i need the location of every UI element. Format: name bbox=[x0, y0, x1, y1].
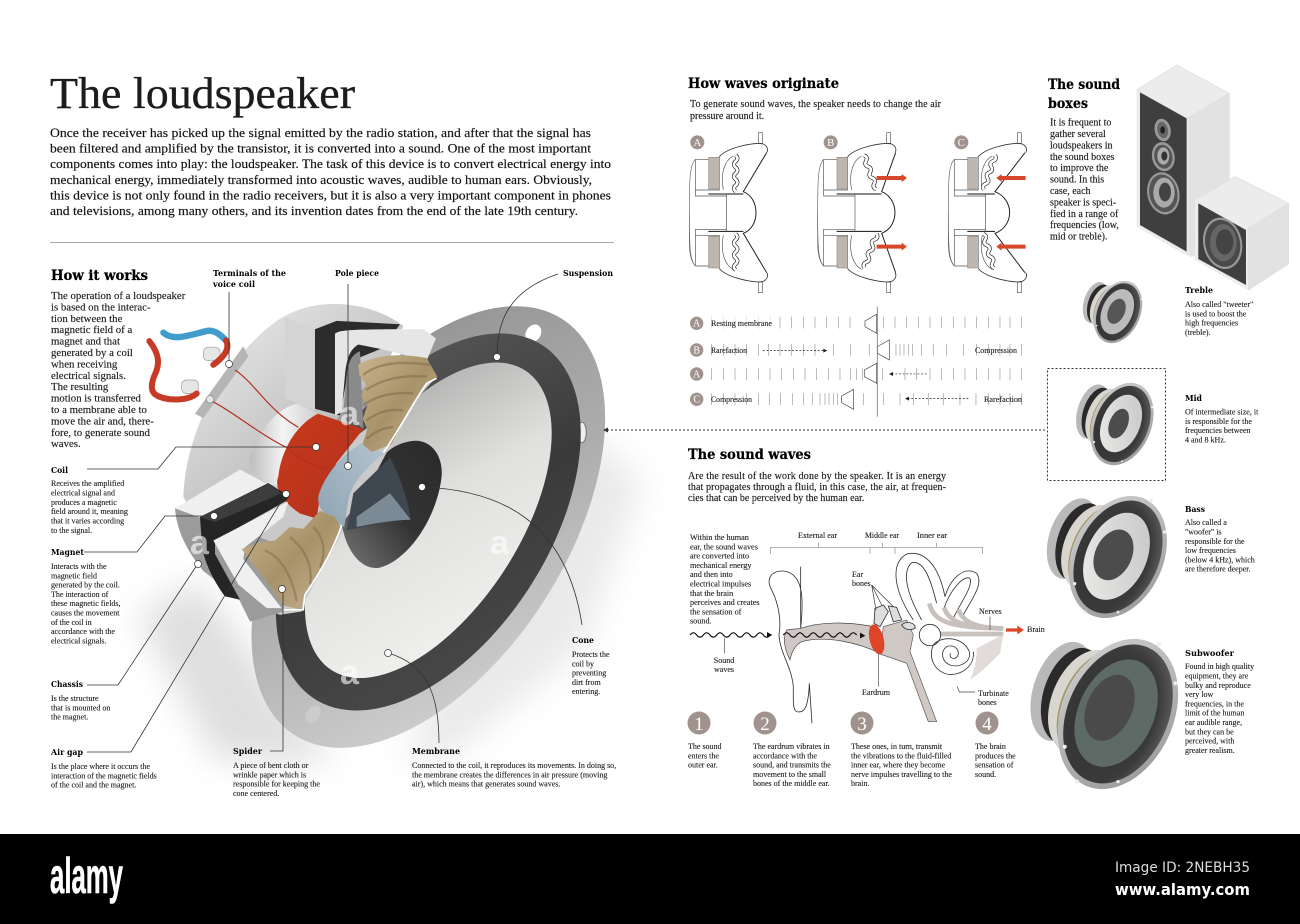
label: treble: (treble). bbox=[1185, 328, 1211, 337]
wave diagram bbox=[690, 307, 1022, 417]
sound boxes paragraph: loudspeakers in bbox=[1050, 140, 1112, 151]
middle ear block bbox=[880, 620, 937, 722]
step 4 bbox=[975, 712, 1016, 779]
callout: magnet: accordance with the bbox=[51, 627, 115, 636]
step 4: produces the bbox=[975, 751, 1016, 760]
label: subwoofer: perceived, with bbox=[1185, 737, 1234, 746]
label: subwoofer: bulky and reproduce bbox=[1185, 681, 1251, 690]
panel: how it works text bbox=[51, 268, 188, 450]
callout: magnet: Interacts with the bbox=[51, 562, 107, 571]
intro paragraph: components comes into play: the loudspeaker. The task of this device is to convert electrical energy into bbox=[50, 157, 611, 171]
dust cap bbox=[342, 441, 442, 568]
how it works paragraph: The resulting bbox=[51, 381, 109, 393]
small cabinet bbox=[1195, 177, 1289, 290]
coil bbox=[277, 414, 363, 519]
lower chassis bowl bbox=[175, 508, 283, 622]
sound waves paragraph: cies that can be perceived by the human ear. bbox=[688, 493, 864, 504]
step 3: inner ear, where they become bbox=[851, 761, 946, 770]
speaker cutaway illustration bbox=[137, 243, 677, 811]
intro paragraph: this device is not only found in the radio receivers, but it is also a very important component in phones bbox=[50, 188, 611, 202]
callout: cone: preventing bbox=[572, 669, 606, 678]
lower magnet bbox=[175, 470, 289, 600]
callout: magnet: these magnetic fields, bbox=[51, 599, 121, 608]
front frame bbox=[179, 243, 677, 811]
sound boxes paragraph: It is frequent to bbox=[1050, 118, 1111, 128]
callout: air gap: Air gap bbox=[50, 748, 83, 758]
sound boxes paragraph: mid or treble). bbox=[1050, 232, 1107, 243]
callout: spider bbox=[233, 747, 320, 798]
callout: coil: electrical signal and bbox=[51, 488, 115, 497]
intro paragraph: been filtered and amplified by the transistor, it is converted into a sound. One of the most important bbox=[50, 142, 592, 156]
callout: coil: field around it, meaning bbox=[51, 507, 128, 516]
how it works paragraph: magnet and that bbox=[51, 336, 120, 348]
wave diagram labels: Compression bbox=[975, 346, 1017, 355]
arrow to brain bbox=[1006, 626, 1024, 634]
red wire bbox=[149, 340, 227, 399]
step 3: These ones, in turn, transmit bbox=[851, 742, 943, 751]
wave diagram: A bbox=[693, 319, 701, 330]
step 2: The eardrum vibrates in bbox=[753, 742, 830, 751]
callout: membrane: Membrane bbox=[412, 747, 461, 757]
lower pole plate bbox=[213, 502, 288, 608]
callout: air gap: interaction of the magnetic fields bbox=[51, 771, 157, 780]
ear labels: Turbinate bbox=[978, 689, 1009, 698]
sound boxes paragraph: frequencies (low, bbox=[1050, 220, 1119, 231]
ear labels: bones bbox=[978, 698, 997, 707]
ear labels: bones bbox=[852, 579, 871, 588]
step 3: the vibrations to the fluid-filled bbox=[851, 751, 951, 760]
heading: the sound boxes: boxes bbox=[1048, 96, 1088, 112]
vestibule and cochlea bbox=[919, 624, 973, 674]
callout: spider: wrinkle paper which is bbox=[233, 770, 306, 779]
watermark letters bbox=[190, 395, 510, 692]
label: subwoofer: very low bbox=[1185, 690, 1213, 699]
label: treble: is used to boost the bbox=[1185, 309, 1247, 318]
membrane triangles bbox=[842, 314, 889, 409]
label: subwoofer: but they can be bbox=[1185, 727, 1234, 736]
sound boxes paragraph: gather several bbox=[1050, 129, 1106, 140]
cross-section B: B bbox=[827, 138, 834, 149]
label: subwoofer: frequencies, in the bbox=[1185, 699, 1244, 708]
callout: cone bbox=[572, 636, 610, 696]
ear section bracket bbox=[771, 543, 983, 554]
wave diagram labels bbox=[710, 316, 1022, 404]
wave diagram labels: Resting membrane bbox=[711, 319, 772, 328]
ear labels: Eardrum bbox=[862, 688, 891, 697]
callout: magnet bbox=[51, 548, 121, 645]
ear intro text: sound. bbox=[690, 617, 712, 626]
sound boxes paragraph: case, each bbox=[1050, 186, 1091, 197]
step 3: nerve impulses travelling to the bbox=[851, 770, 952, 779]
frame mounting holes bbox=[303, 321, 586, 726]
how it works paragraph: The operation of a loudspeaker bbox=[51, 290, 186, 302]
label: mid: 4 and 8 kHz. bbox=[1185, 435, 1226, 444]
callout: spider: cone centered. bbox=[233, 789, 279, 798]
rear basket bbox=[183, 304, 403, 497]
ear intro text: electrical impulses bbox=[690, 580, 751, 588]
canal sound wave bbox=[783, 633, 865, 639]
callout: cone: dirt from bbox=[572, 678, 601, 687]
callout: membrane: the membrane creates the differences in air pressure (moving bbox=[412, 770, 607, 779]
dotted frame around mid speaker bbox=[1048, 368, 1166, 480]
intro paragraph: and televisions, among many others, and its invention dates from the end of the late 19th century. bbox=[50, 204, 578, 218]
label: bass: low frequencies bbox=[1185, 546, 1236, 555]
outgoing sound wave bbox=[690, 632, 772, 638]
label: subwoofer bbox=[1185, 649, 1254, 755]
outer ear bbox=[769, 567, 812, 723]
heading: the sound boxes: The sound bbox=[1048, 77, 1120, 93]
how it works paragraph: generated by a coil bbox=[51, 347, 133, 359]
callout: cone: Protects the bbox=[572, 650, 610, 659]
callout: coil bbox=[51, 466, 128, 535]
terminal posts bbox=[182, 347, 220, 394]
cross-section C bbox=[948, 133, 1027, 293]
speaker: mid bbox=[1070, 372, 1166, 476]
how it works paragraph: electrical signals. bbox=[51, 370, 126, 382]
ear labels: Ear bbox=[852, 570, 863, 579]
how it works paragraph: fore, to generate sound bbox=[51, 427, 151, 439]
step 4: sound. bbox=[975, 770, 996, 779]
callout: coil: that it varies according bbox=[51, 517, 124, 526]
ear labels: External ear bbox=[798, 531, 837, 540]
upper spider bbox=[358, 355, 437, 452]
cochlear tail bbox=[970, 635, 1003, 680]
sound boxes paragraph: speaker is speci- bbox=[1050, 197, 1116, 208]
sound waves paragraph: that propagates through a fluid, in this case, the air, at frequen- bbox=[688, 482, 946, 493]
step 1: outer ear. bbox=[688, 761, 718, 770]
leader lines and dots bbox=[84, 274, 582, 752]
label: bass: Also called a bbox=[1185, 518, 1227, 527]
ear labels: Nerves bbox=[979, 607, 1002, 616]
callout: chassis: Chassis bbox=[51, 680, 83, 690]
wave diagram: A bbox=[693, 369, 701, 380]
watermark letters: a bbox=[190, 524, 210, 562]
callout: spider: Spider bbox=[233, 747, 262, 757]
callout: cone: Cone bbox=[572, 636, 595, 646]
label: bass: are therefore deeper. bbox=[1185, 565, 1251, 574]
sound boxes paragraph: sound. In this bbox=[1050, 175, 1104, 186]
callout: air gap: of the coil and the magnet. bbox=[51, 781, 136, 790]
callout: magnet: The interaction of bbox=[51, 590, 109, 599]
ear labels: Brain bbox=[1027, 625, 1045, 634]
callout: cone: entering. bbox=[572, 687, 600, 696]
step 1: enters the bbox=[688, 751, 719, 760]
ear bones bbox=[874, 605, 915, 630]
intro paragraph: Once the receiver has picked up the signal emitted by the radio station, and after that the signal has bbox=[50, 126, 591, 140]
dotted connector arrow bbox=[603, 428, 1047, 432]
voice coil wires bbox=[213, 370, 327, 470]
wave diagram labels: Rarefaction bbox=[984, 395, 1022, 404]
step 3: brain. bbox=[851, 779, 869, 788]
watermark letters: a bbox=[490, 524, 510, 562]
label: treble bbox=[1185, 286, 1253, 337]
how it works paragraph: magnetic field of a bbox=[51, 324, 132, 336]
inner hollow bbox=[347, 458, 411, 530]
speaker: subwoofer bbox=[1019, 619, 1201, 809]
callout: spider: responsible for keeping the bbox=[233, 780, 320, 789]
label: terminals of the voice coil: voice coil bbox=[212, 280, 256, 290]
image id: Image ID: 2NEBH35 bbox=[1115, 860, 1250, 876]
label: subwoofer: limit of the human bbox=[1185, 709, 1244, 718]
rear cut filling bbox=[183, 377, 437, 615]
step 2: 2 bbox=[760, 714, 770, 735]
ear labels bbox=[714, 531, 1045, 707]
step 3: 3 bbox=[857, 714, 867, 735]
callout: chassis: the magnet. bbox=[51, 713, 88, 722]
membrane bbox=[255, 320, 601, 720]
label: treble: high frequencies bbox=[1185, 319, 1238, 328]
ear diagram bbox=[690, 543, 1024, 723]
label: bass: "woofer" is bbox=[1185, 528, 1222, 536]
terminal plate bbox=[195, 346, 248, 418]
sound boxes paragraph: to improve the bbox=[1050, 163, 1109, 174]
lower spider bbox=[242, 511, 341, 610]
callout: magnet: causes the movement bbox=[51, 608, 120, 618]
label: subwoofer: Subwoofer bbox=[1185, 649, 1234, 659]
callout: chassis: that is mounted on bbox=[51, 703, 110, 712]
cross-section A: A bbox=[693, 138, 701, 149]
step 2: sound, and transmits the bbox=[753, 761, 831, 770]
wave diagram: B bbox=[693, 345, 700, 356]
label: bass: (below 4 kHz), which bbox=[1185, 555, 1255, 564]
label: subwoofer: ear audible range, bbox=[1185, 718, 1242, 727]
watermark letters: a bbox=[340, 395, 360, 433]
label: bass: responsible for the bbox=[1185, 537, 1245, 546]
dashed arrows bbox=[763, 351, 968, 399]
ear intro text: are converted into bbox=[690, 552, 749, 561]
label: pole piece: Pole piece bbox=[335, 269, 380, 279]
step 2: accordance with the bbox=[753, 751, 817, 760]
pole piece former bbox=[318, 443, 385, 527]
label: subwoofer: greater realism. bbox=[1185, 746, 1235, 755]
callout: coil: Receives the amplified bbox=[51, 479, 124, 488]
ear intro text: mechanical energy bbox=[690, 561, 752, 570]
ear labels: Middle ear bbox=[865, 531, 899, 540]
upper magnet block bbox=[285, 317, 436, 429]
ear intro text: and then into bbox=[690, 570, 733, 579]
suspension surround bbox=[213, 279, 643, 765]
callout: magnet: Magnet bbox=[51, 548, 84, 558]
heading: the sound waves: The sound waves bbox=[688, 447, 811, 463]
ear intro text: Within the human bbox=[690, 533, 749, 542]
ear labels: waves bbox=[714, 665, 734, 674]
cross-section A bbox=[689, 133, 768, 293]
label: mid: Of intermediate size, it bbox=[1185, 408, 1259, 416]
label: suspension: Suspension bbox=[563, 269, 613, 279]
callout: membrane bbox=[412, 747, 616, 789]
callout: magnet: magnetic field bbox=[51, 571, 97, 580]
ear intro text: that the brain bbox=[690, 589, 733, 598]
label: treble: Treble bbox=[1185, 286, 1214, 296]
label: bass: Bass bbox=[1185, 505, 1205, 515]
website: www.alamy.com bbox=[1115, 880, 1250, 899]
callout: coil: produces a magnetic bbox=[51, 498, 117, 507]
step 4: The brain bbox=[975, 742, 1006, 751]
label: mid: frequencies between bbox=[1185, 426, 1251, 435]
speaker: bass bbox=[1037, 480, 1186, 634]
watermark letters: a bbox=[340, 654, 360, 692]
blue wire bbox=[163, 331, 227, 341]
sound boxes paragraph: the sound boxes bbox=[1050, 152, 1115, 163]
wave diagram: C bbox=[693, 395, 700, 406]
nerves bbox=[929, 603, 1003, 634]
label: mid: Mid bbox=[1185, 394, 1202, 404]
wave diagram labels: Rarefaction bbox=[711, 346, 747, 355]
callout: membrane: air), which means that generates sound waves. bbox=[412, 780, 560, 789]
how it works paragraph: waves. bbox=[51, 438, 81, 450]
white rear cylinder bbox=[249, 404, 317, 486]
step 2: movement to the small bbox=[753, 770, 827, 779]
how it works paragraph: when receiving bbox=[51, 358, 118, 370]
label: mid bbox=[1185, 394, 1259, 444]
label: treble: Also called "tweeter" bbox=[1185, 300, 1253, 309]
sound waves paragraph: Are the result of the work done by the speaker. It is an energy bbox=[688, 471, 946, 482]
callout: coil: to the signal. bbox=[51, 526, 92, 535]
tall cabinet bbox=[1137, 65, 1229, 257]
sound boxes paragraph: fied in a range of bbox=[1050, 209, 1119, 220]
ear intro text: perceives and creates bbox=[690, 598, 760, 607]
eardrum bbox=[866, 623, 887, 656]
callout: chassis: Is the structure bbox=[51, 694, 99, 703]
callout: spider: A piece of bent cloth or bbox=[233, 761, 309, 770]
how waves paragraph: pressure around it. bbox=[690, 111, 764, 122]
how it works paragraph: move the air and, there- bbox=[51, 415, 154, 427]
ear canal bbox=[784, 623, 880, 660]
step 3 bbox=[850, 712, 952, 788]
callout: magnet: electrical signals. bbox=[51, 636, 107, 645]
footer logo: alamy bbox=[50, 848, 123, 904]
speaker cross-sections bbox=[689, 133, 1027, 417]
step 4: 4 bbox=[982, 714, 992, 735]
step 4: sensation of bbox=[975, 761, 1014, 770]
step 2: bones of the middle ear. bbox=[753, 779, 830, 788]
callout: air gap bbox=[50, 748, 157, 790]
semicircular canals bbox=[896, 553, 979, 620]
heading: how it works: How it works bbox=[51, 268, 148, 284]
wave diagram labels: Compression bbox=[711, 395, 752, 404]
heading: how waves originate: How waves originate bbox=[688, 76, 839, 92]
cross-section B bbox=[818, 133, 907, 293]
label: subwoofer: Found in high quality bbox=[1185, 662, 1254, 671]
ear labels: Inner ear bbox=[917, 531, 947, 540]
intro paragraph: mechanical energy, immediately transformed into acoustic waves, audible to human ears. Obviously, bbox=[50, 173, 592, 187]
step 1 bbox=[688, 712, 722, 770]
how waves paragraph: To generate sound waves, the speaker needs to change the air bbox=[690, 99, 942, 110]
step 2 bbox=[753, 712, 831, 788]
ear intro text: ear, the sound waves bbox=[690, 542, 758, 551]
label: terminals of the voice coil: Terminals of the bbox=[213, 269, 287, 279]
how it works paragraph: tion between the bbox=[51, 313, 123, 325]
callout: cone: coil by bbox=[572, 659, 594, 668]
ear intro text: the sensation of bbox=[690, 607, 742, 616]
label: subwoofer: equipment, they are bbox=[1185, 672, 1249, 680]
footer band bbox=[0, 834, 1300, 924]
title: The loudspeaker bbox=[50, 69, 355, 118]
cross-section C: C bbox=[958, 138, 965, 149]
row badges bbox=[690, 317, 703, 406]
callout: air gap: Is the place where it occurs the bbox=[51, 762, 151, 771]
ear labels: Sound bbox=[714, 656, 734, 665]
how it works paragraph: motion is transferred bbox=[51, 393, 142, 405]
row ticks bbox=[712, 317, 1022, 405]
drop shadow bbox=[137, 429, 643, 760]
speaker cabinets bbox=[1137, 65, 1289, 290]
label: bass bbox=[1185, 505, 1255, 574]
callout: membrane: Connected to the coil, it reproduces its movements. In doing so, bbox=[412, 761, 616, 770]
callout: chassis bbox=[51, 680, 110, 722]
callout: magnet: generated by the coil. bbox=[51, 581, 120, 590]
callout: magnet: of the coil in bbox=[51, 618, 92, 627]
speaker: treble bbox=[1078, 273, 1152, 351]
label: mid: is responsible for the bbox=[1185, 417, 1252, 426]
how it works paragraph: to a membrane able to bbox=[51, 404, 147, 416]
step 1: 1 bbox=[694, 714, 704, 735]
callout: coil: Coil bbox=[51, 466, 69, 476]
step 1: The sound bbox=[688, 742, 722, 751]
how it works paragraph: is based on the interac- bbox=[51, 301, 151, 313]
